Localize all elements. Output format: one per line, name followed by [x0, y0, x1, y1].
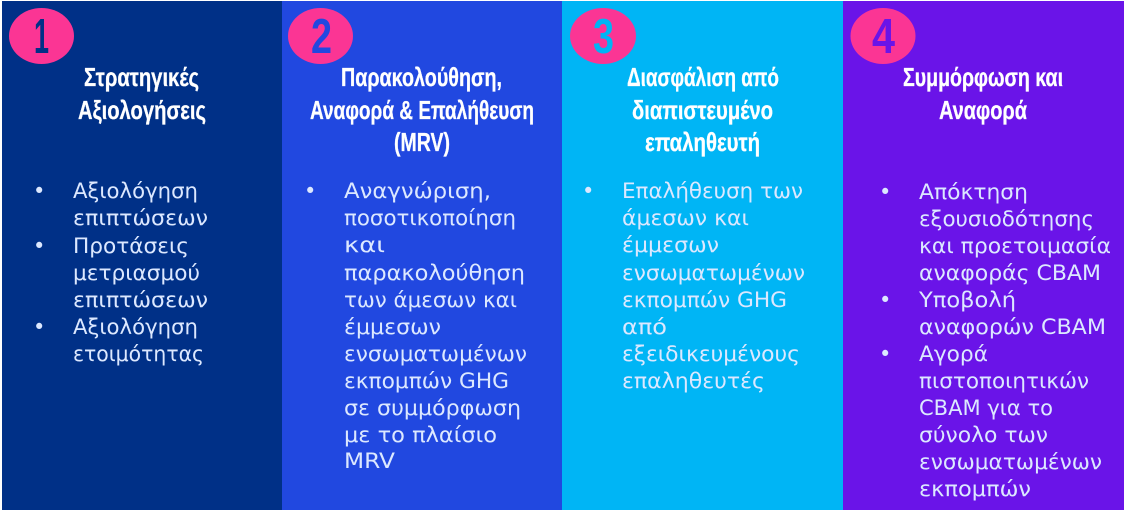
bullet list 2: MRV — [344, 449, 396, 473]
bullet list 3: άμεσων και — [622, 206, 749, 230]
bullet list 3 — [582, 179, 805, 393]
bullet list 3: • — [582, 179, 594, 203]
badge 2 — [288, 8, 353, 64]
badge 4: 4 — [872, 10, 895, 64]
bullet list 2: • — [304, 179, 316, 203]
badge 2: 2 — [311, 10, 332, 64]
bullet list 3: εκπομπών GHG — [622, 288, 787, 312]
bullet list 2: εκπομπών GHG — [344, 369, 509, 393]
heading 2: (MRV) — [394, 127, 450, 157]
heading 2: Παρακολούθηση, — [341, 62, 502, 92]
bullet list 4: • — [879, 180, 891, 204]
heading 1: Αξιολογήσεις — [78, 95, 206, 125]
heading 2: Αναφορά & Επαλήθευση — [310, 95, 534, 125]
bullet list 2 — [304, 179, 527, 473]
bullet list 4: και προετοιμασία — [919, 234, 1111, 258]
badge 4 — [850, 8, 916, 64]
heading 4: Συμμόρφωση και — [903, 62, 1063, 92]
bullet list 4: αναφορών CBAM — [919, 315, 1106, 339]
bullet list 3: έμμεσων — [622, 233, 719, 257]
bullet list 2: και — [344, 233, 385, 257]
bullet list 1: • — [33, 179, 45, 203]
bullet list 4: • — [879, 342, 891, 366]
heading 4 — [903, 62, 1063, 125]
bullet list 4: Απόκτηση — [919, 180, 1028, 204]
badge 3 — [570, 8, 636, 64]
heading 3: Διασφάλιση από — [627, 62, 779, 92]
bullet list 4: Αγορά — [919, 342, 988, 366]
panel 3: assurance by accredited verifier — [562, 1, 843, 510]
bullet list 4: αναφοράς CBAM — [919, 261, 1101, 285]
bullet list 4 — [879, 180, 1111, 501]
heading 1: Στρατηγικές — [84, 62, 199, 92]
bullet list 4: • — [879, 288, 891, 312]
panel 4: compliance and reporting — [843, 1, 1124, 510]
bullet list 1: • — [33, 315, 45, 339]
badge 3: 3 — [593, 10, 614, 64]
bullet list 1: Αξιολόγηση — [73, 315, 198, 339]
bullet list 1 — [33, 179, 208, 366]
heading 3 — [627, 62, 779, 157]
bullet list 4: σύνολο των — [919, 423, 1048, 447]
panel 1: strategic assessments — [2, 1, 282, 510]
bullet list 2: των άμεσων και — [344, 288, 517, 312]
bullet list 3: επαληθευτές — [622, 369, 765, 393]
badge 1 — [9, 8, 74, 64]
bullet list 4: CBAM για το — [919, 396, 1053, 420]
bullet list 3: Επαλήθευση των — [622, 179, 803, 203]
bullet list 1: επιπτώσεων — [73, 288, 208, 312]
bullet list 1: Προτάσεις — [73, 234, 189, 258]
bullet list 2: Αναγνώριση, — [344, 179, 491, 203]
bullet list 1: Αξιολόγηση — [73, 179, 198, 203]
bullet list 2: με το πλαίσιο — [344, 423, 497, 447]
bullet list 4: Υποβολή — [918, 288, 1016, 312]
bullet list 2: παρακολούθηση — [344, 261, 525, 285]
bullet list 2: ενσωματωμένων — [344, 342, 527, 366]
heading 3: επαληθευτή — [645, 127, 760, 157]
badge 1: 1 — [34, 10, 49, 64]
bullet list 1: • — [33, 234, 45, 258]
heading 2 — [310, 62, 534, 157]
bullet list 4: εξουσιοδότησης — [919, 207, 1094, 231]
heading 1 — [78, 62, 206, 125]
bullet list 1: επιπτώσεων — [73, 206, 208, 230]
bullet list 3: από — [622, 315, 667, 339]
bullet list 3: ενσωματωμένων — [622, 261, 805, 285]
heading 4: Αναφορά — [939, 95, 1027, 125]
bullet list 4: ενσωματωμένων — [919, 450, 1102, 474]
panel 2: monitoring, reporting, verification — [282, 1, 562, 510]
bullet list 2: έμμεσων — [344, 315, 441, 339]
bullet list 2: σε συμμόρφωση — [344, 396, 521, 420]
bullet list 3: εξειδικευμένους — [622, 342, 800, 366]
heading 3: διαπιστευμένο — [632, 95, 773, 125]
bullet list 4: πιστοποιητικών — [919, 369, 1089, 393]
bullet list 1: μετριασμού — [73, 261, 200, 285]
bullet list 4: εκπομπών — [919, 477, 1031, 501]
bullet list 1: ετοιμότητας — [73, 342, 204, 366]
bullet list 2: ποσοτικοποίηση — [344, 206, 516, 230]
